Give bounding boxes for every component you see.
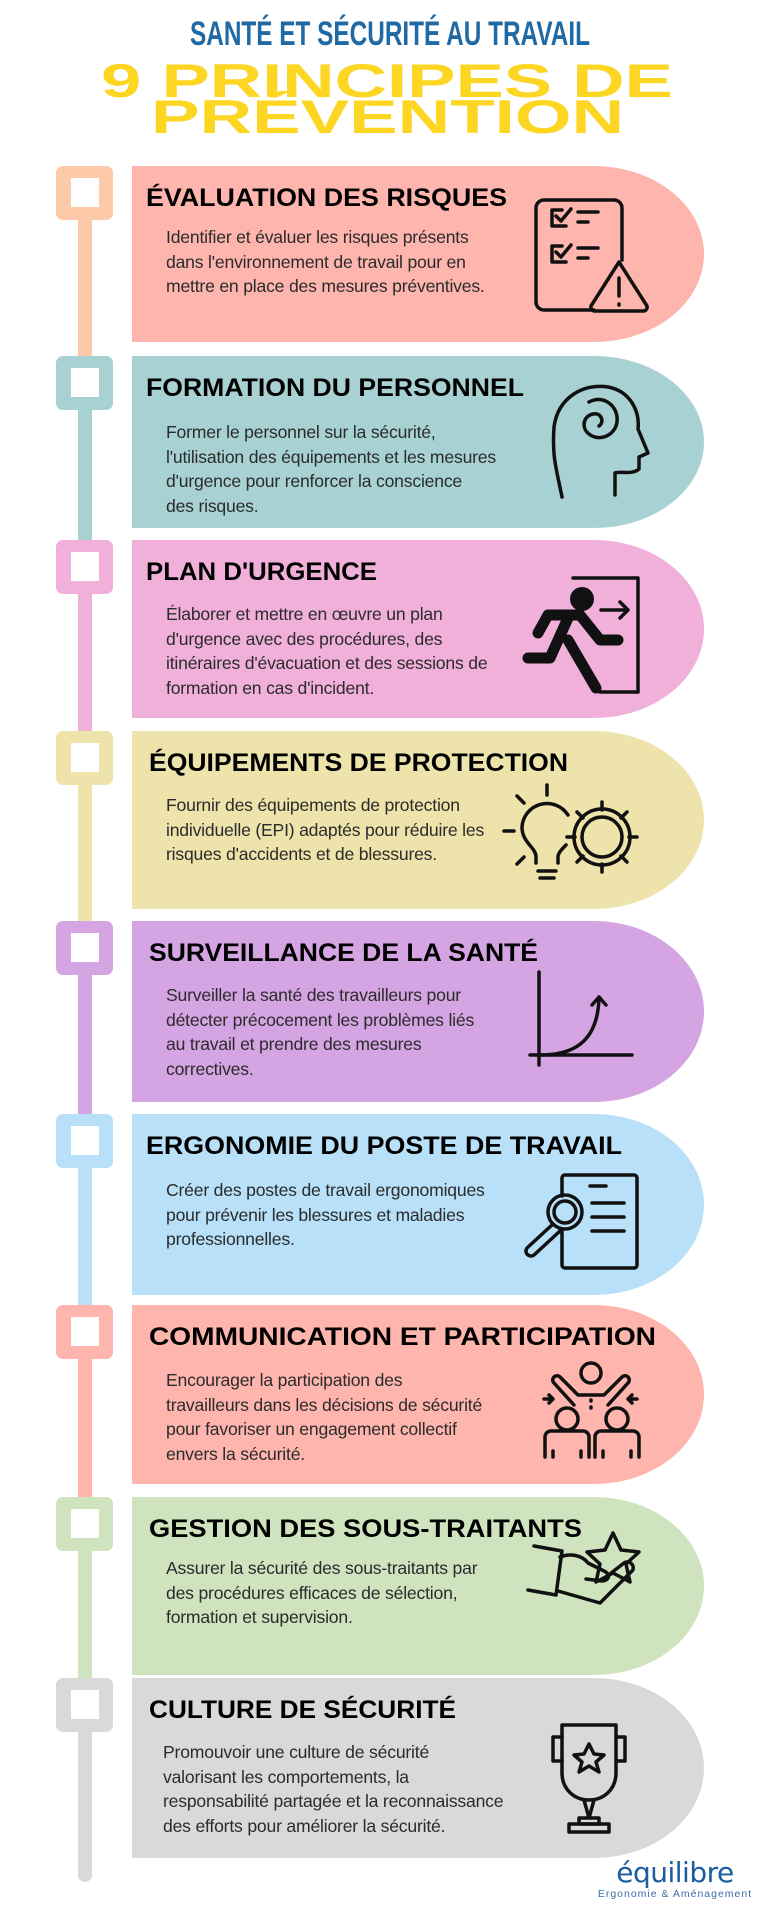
text: d'urgence pour renforcer la conscience xyxy=(166,471,462,491)
text xyxy=(166,985,474,1078)
text: mettre en place des mesures préventives. xyxy=(166,276,485,296)
text xyxy=(166,227,485,296)
text: risques d'accidents et de blessures. xyxy=(166,844,437,864)
panel: formation du personnel xyxy=(132,356,704,528)
text xyxy=(166,422,496,516)
heading: GESTION DES SOUS-TRAITANTS xyxy=(149,1515,582,1543)
text: travailleurs dans les décisions de sécurité xyxy=(166,1394,482,1414)
title: 9 PRINCIPES DE xyxy=(101,55,673,107)
text: des procédures efficaces de sélection, xyxy=(166,1582,457,1602)
panel: plan d'urgence xyxy=(132,540,704,718)
text: dans l'environnement de travail pour en xyxy=(166,252,466,272)
text: responsabilité partagée et la reconnaissance xyxy=(163,1791,503,1811)
icon: hand with star xyxy=(526,1531,641,1605)
handle 1 xyxy=(56,166,113,220)
heading: COMMUNICATION ET PARTICIPATION xyxy=(149,1323,656,1351)
text: détecter précocement les problèmes liés xyxy=(166,1010,474,1030)
text xyxy=(166,604,487,698)
handle 7 xyxy=(56,1305,113,1359)
text: correctives. xyxy=(166,1058,254,1078)
text: Créer des postes de travail ergonomiques xyxy=(166,1180,485,1200)
text xyxy=(166,795,484,864)
text: valorisant les comportements, la xyxy=(163,1766,409,1786)
text: itinéraires d'évacuation et des sessions de xyxy=(166,653,487,673)
icon: magnifier document xyxy=(524,1173,639,1270)
handle 4 xyxy=(56,731,113,785)
panel: communication et participation xyxy=(132,1305,704,1484)
text: Encourager la participation des xyxy=(166,1370,402,1390)
handle 5 xyxy=(56,921,113,975)
text: Former le personnel sur la sécurité, xyxy=(166,422,436,442)
logo xyxy=(598,1856,752,1900)
handle 3 xyxy=(56,540,113,594)
text: professionnelles. xyxy=(166,1229,295,1249)
text: Élaborer et mettre en œuvre un plan xyxy=(166,604,443,624)
text: d'urgence avec des procédures, des xyxy=(166,628,442,648)
text: au travail et prendre des mesures xyxy=(166,1034,422,1054)
text: des efforts pour améliorer la sécurité. xyxy=(163,1816,445,1836)
timeline line segments xyxy=(78,220,92,1882)
text: Fournir des équipements de protection xyxy=(166,795,460,815)
logo: Ergonomie & Aménagement xyxy=(598,1888,752,1900)
handle 6 xyxy=(56,1114,113,1168)
panel: évaluation des risques xyxy=(132,166,704,342)
panel: ergonomie du poste de travail xyxy=(132,1114,704,1295)
text: Assurer la sécurité des sous-traitants par xyxy=(166,1558,477,1578)
text: individuelle (EPI) adaptés pour réduire les xyxy=(166,820,484,840)
text: pour prévenir les blessures et maladies xyxy=(166,1204,464,1224)
icon: checklist warning xyxy=(534,198,649,313)
icon: bulb and gear xyxy=(502,783,639,880)
text xyxy=(166,1370,482,1464)
text: Surveiller la santé des travailleurs pour xyxy=(166,985,461,1005)
text: envers la sécurité. xyxy=(166,1444,305,1464)
heading: ERGONOMIE DU POSTE DE TRAVAIL xyxy=(146,1132,622,1160)
title: PRÉVENTION xyxy=(151,90,624,143)
icon: growth graph xyxy=(528,970,634,1067)
handle 8 xyxy=(56,1497,113,1551)
text xyxy=(166,1180,485,1249)
panel: gestion des sous-traitants xyxy=(132,1497,704,1675)
icon: head spiral xyxy=(552,384,650,499)
text: Identifier et évaluer les risques présents xyxy=(166,227,469,247)
title xyxy=(101,55,673,143)
text: formation et supervision. xyxy=(166,1607,353,1627)
text: l'utilisation des équipements et les mesures xyxy=(166,446,496,466)
panel: équipements de protection xyxy=(132,731,704,909)
handle 9 xyxy=(56,1678,113,1732)
heading: ÉQUIPEMENTS DE PROTECTION xyxy=(149,748,568,777)
panel: culture de sécurité xyxy=(132,1678,704,1858)
icon: people xyxy=(542,1361,641,1459)
text: pour favoriser un engagement collectif xyxy=(166,1419,457,1439)
heading: CULTURE DE SÉCURITÉ xyxy=(149,1695,456,1724)
text xyxy=(163,1742,503,1836)
text xyxy=(166,1558,478,1627)
heading: ÉVALUATION DES RISQUES xyxy=(146,183,507,212)
icon: emergency exit xyxy=(522,576,640,694)
icon: trophy xyxy=(551,1723,627,1834)
handle 2 xyxy=(56,356,113,410)
text: des risques. xyxy=(166,496,258,516)
heading: PLAN D'URGENCE xyxy=(146,558,377,586)
panel: surveillance de la santé xyxy=(132,921,704,1102)
heading: FORMATION DU PERSONNEL xyxy=(146,374,524,402)
heading: SURVEILLANCE DE LA SANTÉ xyxy=(149,938,538,967)
text: Promouvoir une culture de sécurité xyxy=(163,1742,429,1762)
logo: équilibre xyxy=(616,1856,734,1889)
text: formation en cas d'incident. xyxy=(166,678,374,698)
